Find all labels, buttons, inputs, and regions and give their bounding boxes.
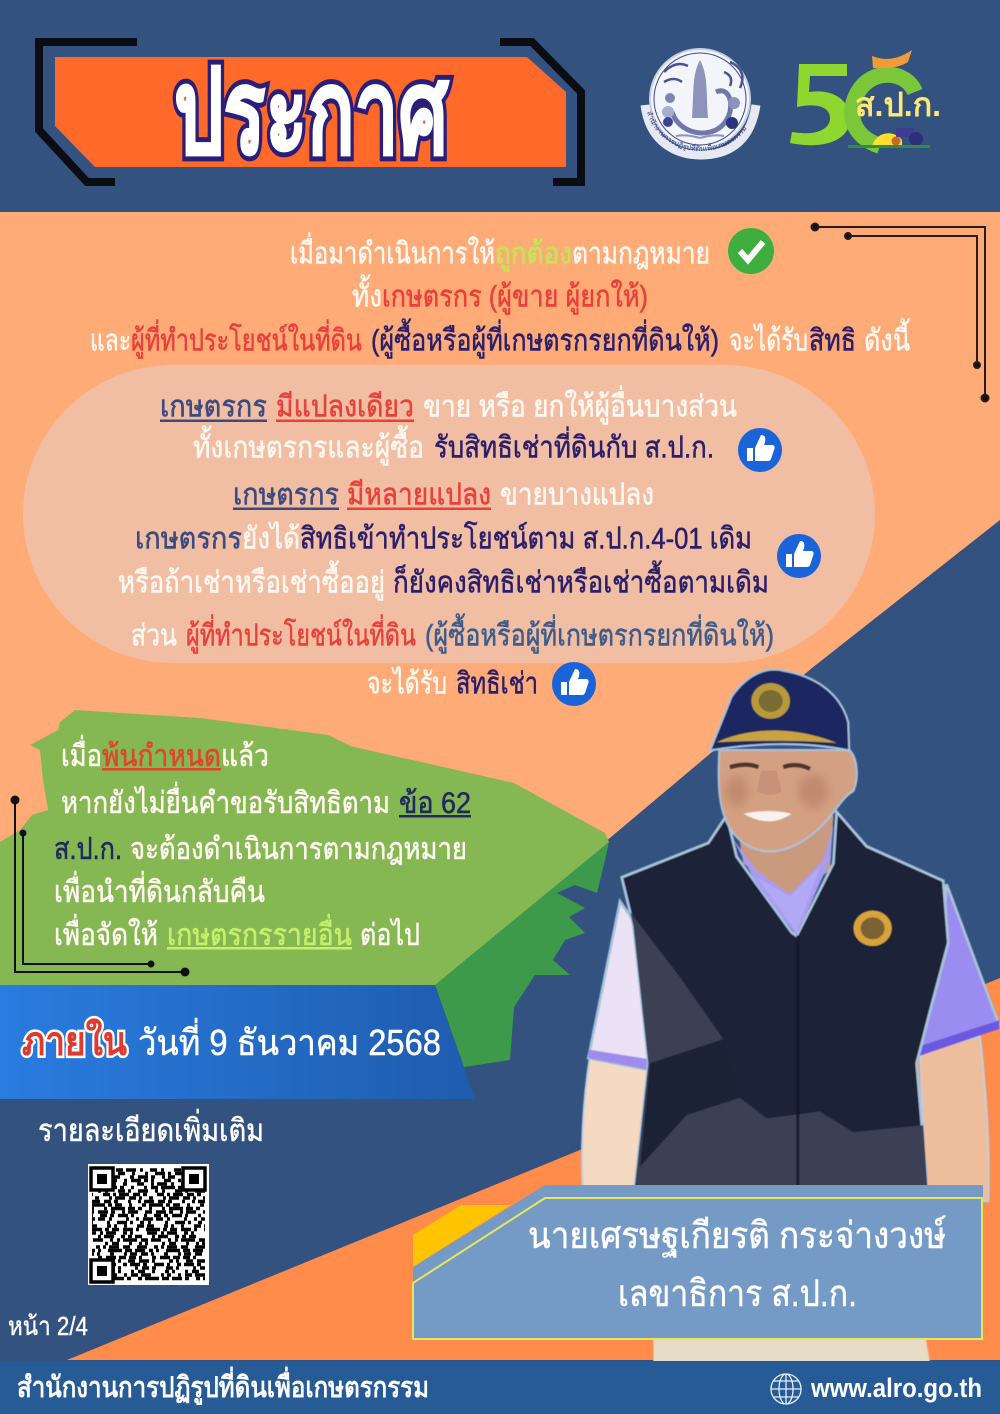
rights text block: เกษตรกร: [160, 390, 267, 424]
icon: green check: [728, 228, 774, 274]
deadline notice text: หากยังไม่ยื่นคำขอรับสิทธิตาม: [61, 782, 390, 820]
deadline text: ภายใน: [22, 1018, 127, 1064]
rights text block: ขาย หรือ ยกให้ผู้อื่นบางส่วน: [423, 386, 737, 424]
rights text block: หรือถ้าเช่าหรือเช่าซื้ออยู่: [118, 560, 385, 600]
bracket lines top right: [812, 224, 988, 402]
QR finder patterns: [91, 1168, 205, 1282]
QR code: [88, 1164, 209, 1285]
intro text block: เกษตรกร (ผู้ขาย ผู้ยกให้): [382, 280, 648, 314]
deadline notice text: เมื่อ: [61, 735, 102, 773]
deadline notice text: ข้อ 62: [399, 787, 471, 820]
icon: globe: [771, 1374, 801, 1404]
intro text block: สิทธิ: [809, 324, 856, 358]
rights text block: สิทธิเช่า: [456, 668, 538, 700]
bracket lines bottom left: [12, 796, 188, 976]
rights text block: มีหลายแปลง: [347, 478, 491, 512]
intro text block: ดังนี้: [864, 318, 910, 358]
nose: [757, 771, 782, 795]
rights text block: ขายบางแปลง: [500, 478, 654, 512]
deadline notice text: เพื่อนำที่ดินกลับคืน: [54, 871, 265, 909]
brush shape: dark green: [435, 842, 609, 1067]
cap brim braid: [717, 731, 837, 743]
intro text block: (ผู้ซื้อหรือผู้ที่เกษตรกรยกที่ดินให้): [371, 318, 719, 358]
face: [719, 750, 857, 851]
deadline text: วันที่ 9 ธันวาคม 2568: [138, 1018, 441, 1063]
cap: [710, 670, 849, 751]
smile: [743, 811, 792, 821]
deadline notice text: พ้นกำหนด: [102, 740, 221, 773]
vest badge: [853, 910, 892, 946]
logo flame: [872, 50, 912, 68]
title: ประกาศ: [174, 47, 449, 179]
intro text block: ทั้ง: [352, 274, 382, 314]
footer bar: [0, 1361, 1000, 1414]
rights text block: ยังได้: [242, 520, 300, 556]
title banner: [55, 57, 566, 167]
header bar: [35, 38, 941, 186]
deadline notice text: เกษตรกรรายอื่น: [167, 914, 352, 952]
background: lower orange triangle: [67, 978, 1000, 1360]
logo: ALRO seal: [640, 48, 760, 160]
cheeks: [725, 774, 828, 808]
title: [174, 47, 449, 179]
title banner bracket left: [39, 42, 137, 182]
intro text block: จะได้รับ: [729, 322, 808, 358]
right sleeve: [920, 884, 999, 1055]
rights text block: [118, 386, 774, 700]
right arm: [920, 1036, 989, 1201]
icon: thumbs up 1: [738, 428, 782, 472]
zipper: [797, 936, 799, 1201]
name plate accent: [413, 1205, 511, 1267]
deadline notice text: จะต้องดำเนินการตามกฎหมาย: [130, 833, 467, 866]
name plate box: [413, 1185, 983, 1340]
pill panel: [23, 365, 875, 663]
person photo illustration: [582, 670, 999, 1363]
vest sunlit panels: [630, 912, 928, 1201]
title: ประกาศ: [174, 47, 449, 179]
intro text block: [90, 232, 910, 358]
intro text block: ผู้ที่ทำประโยชน์ในที่ดิน: [131, 320, 362, 358]
rights text block: ทั้งเกษตรกรและผู้ซื้อ: [193, 426, 424, 466]
name plate: [413, 1185, 983, 1340]
neck: [737, 815, 833, 898]
rights text block: ก็ยังคงสิทธิเช่าหรือเช่าซื้อตามเดิม: [393, 560, 769, 600]
deadline band: [0, 985, 475, 1099]
position: เลขาธิการ ส.ป.ก.: [618, 1273, 857, 1314]
deadline notice text: เพื่อจัดให้: [54, 914, 158, 952]
logo sun and tractor: [872, 133, 902, 146]
left arm: [582, 1056, 648, 1201]
deadline notice text: ต่อไป: [360, 917, 420, 952]
title banner bracket right: [500, 42, 581, 182]
name: นายเศรษฐเกียรติ กระจ่างวงษ์: [528, 1215, 946, 1258]
icon: thumbs up 2: [777, 534, 821, 578]
intro text block: ตามกฎหมาย: [572, 238, 710, 270]
page number: หน้า 2/4: [8, 1311, 88, 1341]
rights text block: เกษตรกร: [135, 522, 242, 556]
intro text block: เมื่อมาดำเนินการให้: [290, 232, 495, 270]
rights text block: (ผู้ซื้อหรือผู้ที่เกษตรกรยกที่ดินให้): [425, 614, 774, 654]
rights text block: มีแปลงเดียว: [276, 390, 414, 424]
vest: [622, 812, 948, 1201]
intro text block: ถูกต้อง: [495, 238, 572, 272]
rights text block: ผู้ที่ทำประโยชน์ในที่ดิน: [186, 614, 416, 654]
footer organisation: สำนักงานการปฏิรูปที่ดินเพื่อเกษตรกรรม: [17, 1366, 429, 1405]
rights text block: ส่วน: [131, 620, 177, 652]
deadline notice text: แล้ว: [221, 740, 269, 773]
rights text block: จะได้รับ: [367, 666, 447, 700]
more details heading: รายละเอียดเพิ่มเติม: [38, 1109, 264, 1148]
logo: ALRO seal: สำนักงานการปฏิรูปที่ดินเพื่อเกษตรกรรม: [647, 111, 746, 151]
brush shape: light green: [0, 710, 609, 985]
intro text block: และ: [90, 324, 131, 358]
footer website: www.alro.go.th: [810, 1373, 982, 1403]
logo zero arc: [852, 75, 915, 146]
logo numeral five: [790, 64, 850, 145]
left sleeve: [588, 901, 660, 1070]
shirt collar: [733, 826, 833, 936]
trousers: [653, 1304, 930, 1363]
cap badge: [751, 683, 790, 719]
deadline notice text: ส.ป.ก.: [54, 833, 122, 866]
icon: thumbs up 3: [552, 662, 596, 706]
seal ribbon: [645, 105, 756, 155]
deadline text: [22, 1018, 441, 1064]
logo: 50 years ALRO: [790, 50, 941, 148]
logo label: ส.ป.ก.: [855, 86, 941, 123]
rights text block: เกษตรกร: [233, 478, 339, 512]
deadline notice text: [54, 735, 471, 952]
rights text block: รับสิทธิเช่าที่ดินกับ ส.ป.ก.: [434, 426, 714, 464]
rights text block: สิทธิเข้าทำประโยชน์ตาม ส.ป.ก.4-01 เดิม: [300, 520, 752, 556]
background: peach diagonal panel: [0, 212, 1000, 985]
